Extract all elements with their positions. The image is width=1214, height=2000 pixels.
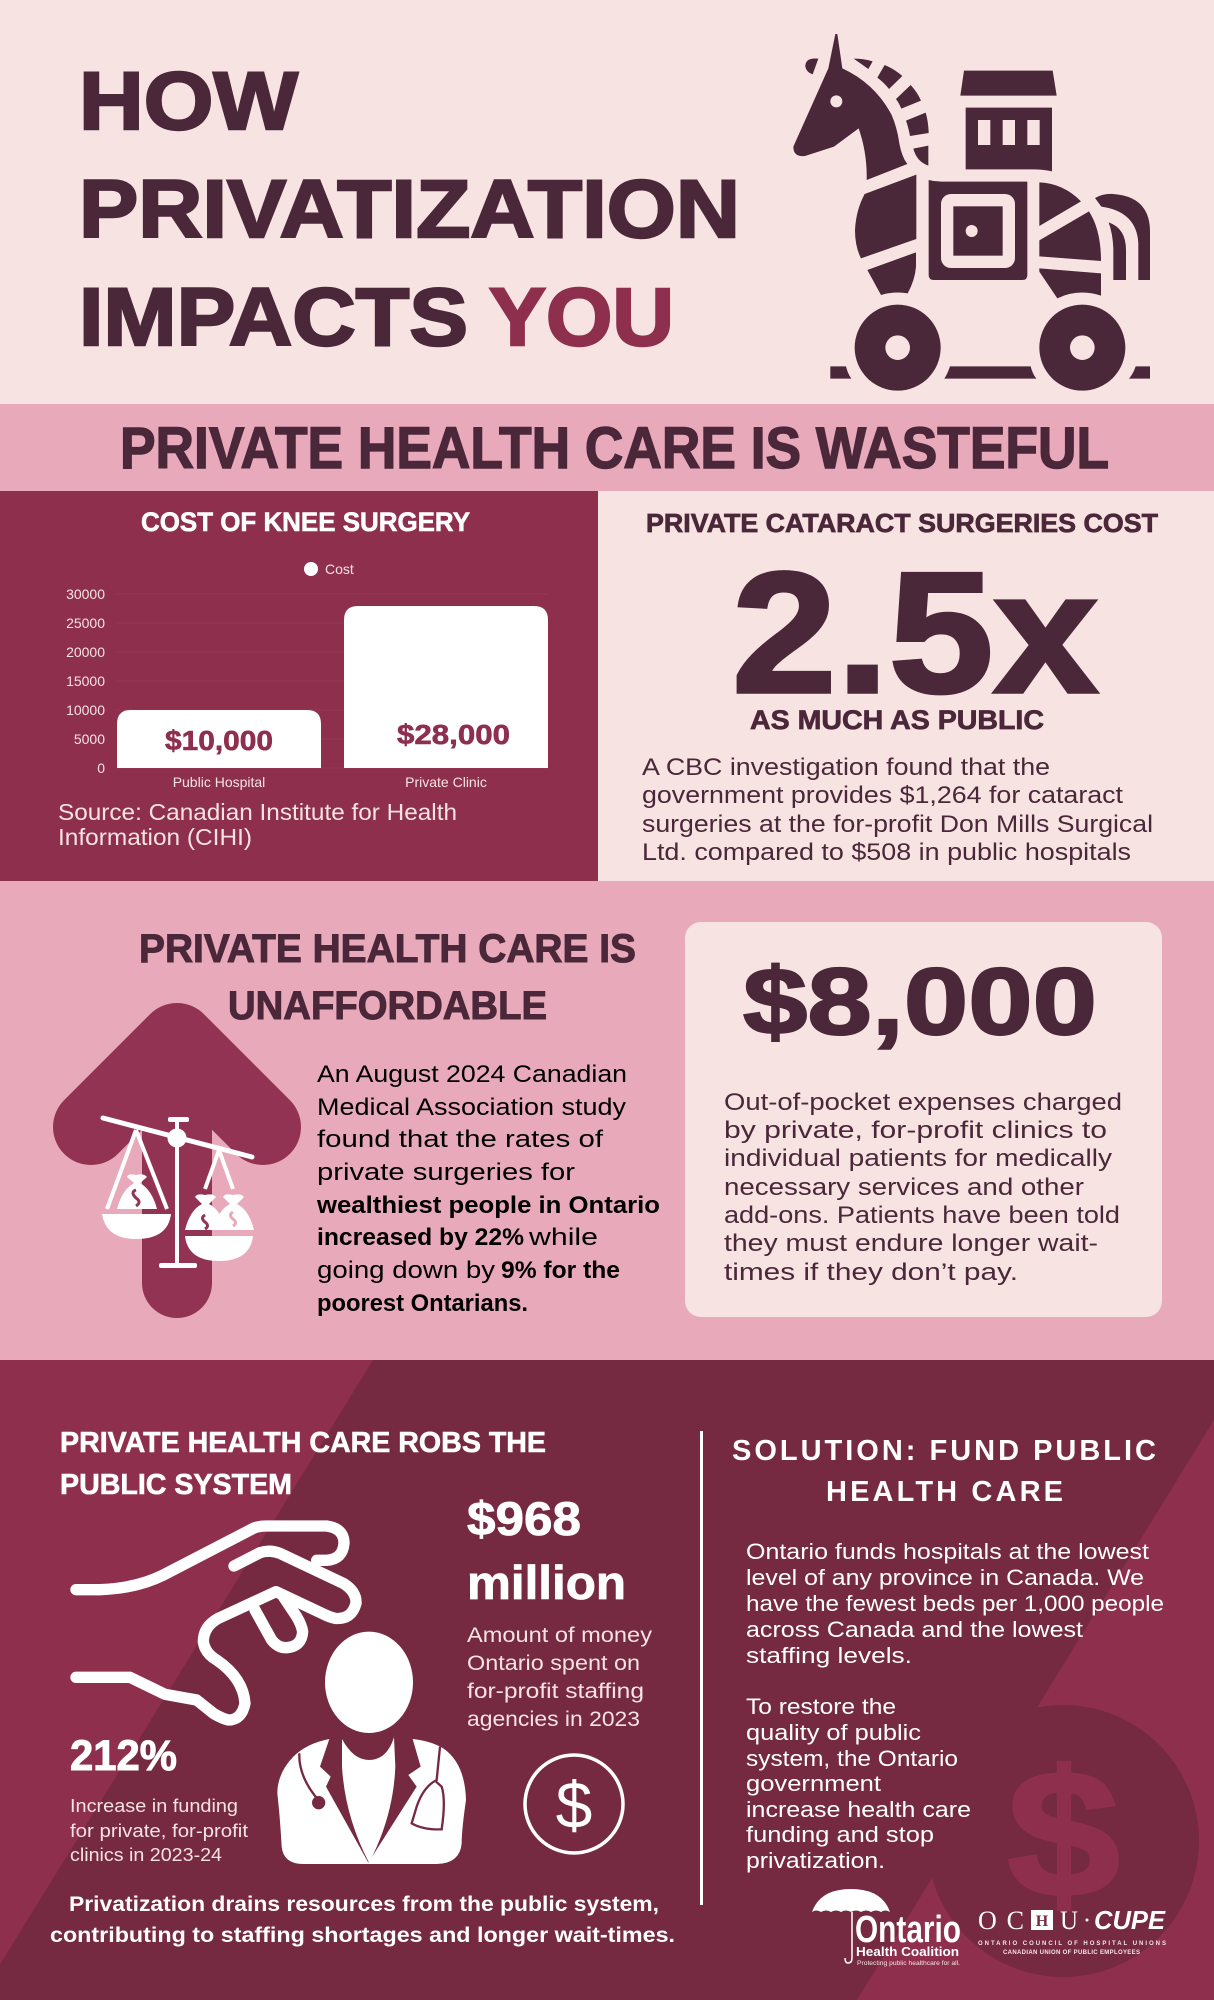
paragraph: Ontario funds hospitals: level of any province in Canada. We (746, 1565, 1144, 1590)
y axis labels: 15000 (66, 673, 105, 689)
logo: OCHU CUPE: OC (978, 1906, 1024, 1935)
logo: OCHU CUPE: U (1060, 1906, 1078, 1935)
text: amount spent on staffing agencies: Ontario spent on (467, 1652, 640, 1675)
paragraph: to restore the quality: increase health care (746, 1797, 971, 1822)
logo: OCHU CUPE (978, 1905, 1166, 1956)
paragraph: to restore the quality: system, the Ontario (746, 1746, 958, 1771)
text: amount spent on staffing agencies: for-profit staffing (467, 1680, 644, 1703)
y axis labels: 30000 (66, 586, 105, 602)
paragraph: Ontario funds hospitals (746, 1539, 1164, 1668)
legend: Cost (325, 561, 354, 577)
paragraph: CMA study (316, 1061, 660, 1317)
text: amount spent on staffing agencies: agencies in 2023 (467, 1708, 640, 1731)
paragraph: Ontario funds hospitals: staffing levels. (746, 1643, 912, 1668)
card: $8,000 out-of-pocket (685, 922, 1162, 1317)
paragraph: CMA study: private surgeries for (317, 1159, 575, 1186)
stat: $968 million: million (467, 1556, 626, 1609)
panel: wasteful banner (0, 404, 1214, 491)
paragraph: out-of-pocket expenses: add-ons. Patients have been told (724, 1202, 1120, 1229)
heading: private cataract surgeries cost: PRIVATE CATARACT SURGERIES COST (646, 508, 1158, 538)
paragraph: out-of-pocket expenses: times if they don’t pay. (724, 1259, 1018, 1286)
stat: 212%: 212% (70, 1732, 177, 1780)
paragraph: CBC investigation: A CBC investigation found that the (642, 754, 1050, 781)
bar chart (66, 561, 548, 790)
title: PRIVATIZATION (79, 164, 740, 255)
paragraph: CMA study: while (528, 1224, 598, 1251)
paragraph: to restore the quality: government (746, 1771, 881, 1796)
panel: robs the public system and solution (0, 1360, 1214, 2000)
text: increase in funding: Increase in funding (70, 1796, 238, 1816)
text: privatization drains resources: contributing to staffing shortages and longer wait-times. (50, 1924, 675, 1947)
bar: public hospital: $10,000 (165, 725, 273, 756)
panel: title header (0, 0, 1214, 404)
icon: large dollar sign watermark: $ (1007, 1734, 1120, 1935)
source note: Source: Canadian Institute for Health (58, 799, 457, 825)
bar: public hospital: Public Hospital (173, 774, 265, 790)
logo: OCHU CUPE: H (1036, 1913, 1049, 1930)
heading: solution (732, 1435, 1156, 1508)
paragraph: CMA study: wealthiest people in Ontario (316, 1192, 660, 1219)
logo: OCHU CUPE: CUPE (1094, 1905, 1166, 1935)
paragraph: CMA study: An August 2024 Canadian (317, 1061, 627, 1088)
logo: Ontario Health Coalition: Ontario (855, 1909, 961, 1951)
big stat: $8,000: $8,000 (743, 949, 1097, 1055)
title (79, 56, 740, 363)
heading: robs the public system: PRIVATE HEALTH CARE ROBS THE (60, 1427, 546, 1459)
paragraph: out-of-pocket expenses: Out-of-pocket expenses charged (724, 1089, 1122, 1116)
paragraph: to restore the quality: funding and stop (746, 1822, 934, 1847)
paragraph: out-of-pocket expenses: necessary services and other (724, 1174, 1084, 1201)
panel: unaffordable section (0, 881, 1214, 1360)
bar: private clinic (344, 606, 548, 790)
subheading: as much as public: AS MUCH AS PUBLIC (750, 705, 1044, 735)
text: increase in funding (70, 1796, 248, 1865)
paragraph: out-of-pocket expenses (724, 1089, 1122, 1286)
divider (700, 1431, 703, 1905)
title: HOW (79, 56, 299, 147)
icon: trojan horse (793, 34, 1150, 391)
paragraph: to restore the quality (746, 1694, 971, 1873)
y axis labels: 5000 (74, 731, 105, 747)
icon: dollar circle (525, 1755, 623, 1853)
text: amount spent on staffing agencies: Amount of money (467, 1624, 653, 1647)
paragraph: CMA study: Medical Association study (317, 1094, 626, 1121)
logo: Ontario Health Coalition (812, 1889, 961, 1967)
paragraph: CMA study: going down by (317, 1257, 495, 1284)
paragraph: to restore the quality: quality of public (746, 1720, 921, 1745)
paragraph: CBC investigation (642, 754, 1153, 866)
paragraph: Ontario funds hospitals: across Canada and the lowest (746, 1617, 1083, 1642)
panel: cost of knee surgery (0, 491, 598, 881)
source note: Information (CIHI) (58, 824, 252, 850)
heading: robs the public system: PUBLIC SYSTEM (60, 1469, 292, 1501)
logo: Ontario Health Coalition: Protecting public healthcare for all. (857, 1960, 960, 1967)
heading: private health care is wasteful: PRIVATE HEALTH CARE IS WASTEFUL (120, 416, 1109, 481)
source note (58, 799, 457, 850)
bar: public hospital (117, 710, 321, 790)
y axis labels (66, 586, 105, 776)
logo: Ontario Health Coalition: Health Coalition (856, 1944, 959, 1959)
legend (304, 561, 354, 577)
bar: private clinic: Private Clinic (405, 774, 487, 790)
paragraph: CBC investigation: surgeries at the for-profit Don Mills Surgical (642, 811, 1153, 838)
title: IMPACTS (79, 272, 468, 363)
paragraph: to restore the quality: To restore the (746, 1694, 896, 1719)
text: amount spent on staffing agencies (467, 1624, 653, 1731)
paragraph: CMA study: 9% for the (501, 1257, 620, 1284)
icon: doctor with stethoscope (277, 1632, 466, 1864)
bar: private clinic: $28,000 (397, 719, 510, 750)
y axis labels: 0 (97, 760, 105, 776)
heading: cost of knee surgery: COST OF KNEE SURGERY (141, 507, 470, 537)
icon: hand (76, 1526, 356, 1720)
paragraph: CMA study: increased by 22% (317, 1224, 524, 1251)
heading: private health care is unaffordable: UNAFFORDABLE (228, 984, 547, 1028)
text: privatization drains resources (50, 1893, 675, 1947)
money bag: left pan (117, 1174, 157, 1209)
paragraph: out-of-pocket expenses: by private, for-profit clinics to (724, 1117, 1107, 1144)
logo: OCHU CUPE: ONTARIO COUNCIL OF HOSPITAL UNIONS (978, 1941, 1166, 1947)
y axis labels: 20000 (66, 644, 105, 660)
panel: cataract surgeries (598, 491, 1214, 881)
text: privatization drains resources: Privatization drains resources from the public system, (69, 1893, 659, 1916)
paragraph: Ontario funds hospitals: have the fewest beds per 1,000 people (746, 1591, 1164, 1616)
y axis labels: 10000 (66, 702, 105, 718)
heading: solution: SOLUTION: FUND PUBLIC (732, 1435, 1156, 1467)
money bag: right pan back (213, 1194, 254, 1230)
money bag: right pan front (185, 1194, 226, 1230)
text: increase in funding: for private, for-profit (70, 1821, 248, 1841)
heading: private health care is unaffordable (139, 927, 636, 1028)
text: increase in funding: clinics in 2023-24 (70, 1845, 222, 1865)
paragraph: out-of-pocket expenses: they must endure longer wait- (724, 1230, 1098, 1257)
y axis labels: 25000 (66, 615, 105, 631)
paragraph: CBC investigation: government provides $1,264 for cataract (642, 782, 1123, 809)
paragraph: CBC investigation: Ltd. compared to $508 in public hospitals (642, 839, 1131, 866)
icon: dollar circle: $ (556, 1768, 592, 1842)
heading: robs the public system (60, 1427, 546, 1501)
big stat: 2.5x: 2.5x (732, 537, 1098, 729)
paragraph: Ontario funds hospitals: Ontario funds hospitals at the lowest (746, 1539, 1149, 1564)
logo: OCHU CUPE: CANADIAN UNION OF PUBLIC EMPLOYEES (1003, 1950, 1140, 1956)
title: YOU (489, 272, 674, 363)
paragraph: out-of-pocket expenses: individual patients for medically (724, 1145, 1112, 1172)
stat: $968 million (467, 1492, 626, 1609)
icon: up arrow with scales (91, 1041, 263, 1283)
heading: private health care is unaffordable: PRIVATE HEALTH CARE IS (139, 927, 636, 971)
paragraph: CMA study: found that the rates of (317, 1126, 603, 1153)
paragraph: to restore the quality: privatization. (746, 1848, 885, 1873)
heading: solution: HEALTH CARE (826, 1476, 1063, 1508)
stat: $968 million: $968 (467, 1492, 581, 1545)
paragraph: CMA study: poorest Ontarians. (317, 1290, 528, 1317)
